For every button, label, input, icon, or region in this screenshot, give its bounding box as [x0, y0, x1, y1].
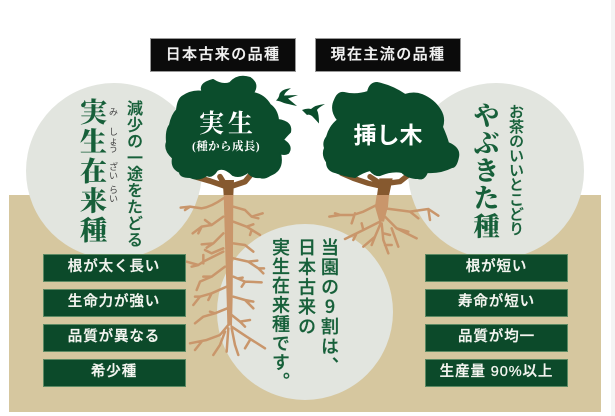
text: center circle [268, 238, 343, 392]
text: center circle: 実生在来種です。 [268, 238, 294, 392]
list: seedling traits [43, 254, 186, 387]
circle: left [26, 83, 202, 259]
text: left circle ruby: ょ [109, 136, 118, 146]
text: right circle title: やぶきた種 [470, 102, 499, 240]
tree label: cutting: 挿し木 [354, 122, 422, 148]
text: left circle title: 実生在来種 [76, 98, 106, 246]
tree label: seedling: 実生 [199, 111, 257, 138]
text: left circle ruby: み [109, 107, 118, 117]
circle: center [217, 224, 393, 400]
list: cutting traits [425, 254, 568, 387]
circle: right [408, 83, 584, 259]
text: left circle ruby: い [109, 170, 118, 180]
tree label: seedling [192, 110, 260, 153]
text: left circle ruby [109, 107, 118, 204]
text: left circle ruby: ら [109, 185, 118, 195]
list: cutting traits: 根が短い [466, 259, 527, 275]
list: seedling traits: 品質が異なる [68, 329, 160, 345]
text: left circle tagline: 減少の一途をたどる [123, 100, 147, 248]
list: seedling traits: 根が太く長い [68, 259, 160, 275]
ground panel [9, 195, 601, 412]
heading: mainstream varieties: 現在主流の品種 [331, 46, 445, 63]
heading: native varieties: 日本古来の品種 [166, 46, 280, 63]
list: cutting traits: 生産量 90%以上 [440, 364, 553, 380]
text: left circle ruby: ざ [109, 162, 118, 172]
tree: seedling roots and trunk [181, 172, 265, 355]
list: cutting traits: 品質が均一 [458, 329, 535, 345]
list: seedling traits: 生命力が強い [68, 294, 160, 310]
text: left circle ruby: し [109, 127, 118, 137]
list: seedling traits: 希少種 [91, 364, 137, 380]
text: right circle tagline: お茶のいいとこどり [506, 104, 527, 235]
right margin strip [611, 0, 615, 416]
tree label: seedling: (種から成長) [192, 141, 260, 153]
tree: cutting roots and trunk [329, 173, 438, 253]
text: center circle: 当園の9割は、 [317, 238, 343, 377]
heading: mainstream varieties [315, 38, 461, 72]
heading: native varieties [150, 38, 296, 72]
icon: swallow left [276, 88, 298, 106]
text: left circle ruby: う [109, 144, 118, 154]
icon: swallow right [302, 104, 325, 124]
text: left circle ruby: い [109, 194, 118, 204]
tree crown: cutting [324, 83, 458, 178]
tree crown: seedling [166, 77, 290, 179]
text: center circle: 日本古来の [294, 238, 320, 337]
list: cutting traits: 寿命が短い [458, 294, 535, 310]
